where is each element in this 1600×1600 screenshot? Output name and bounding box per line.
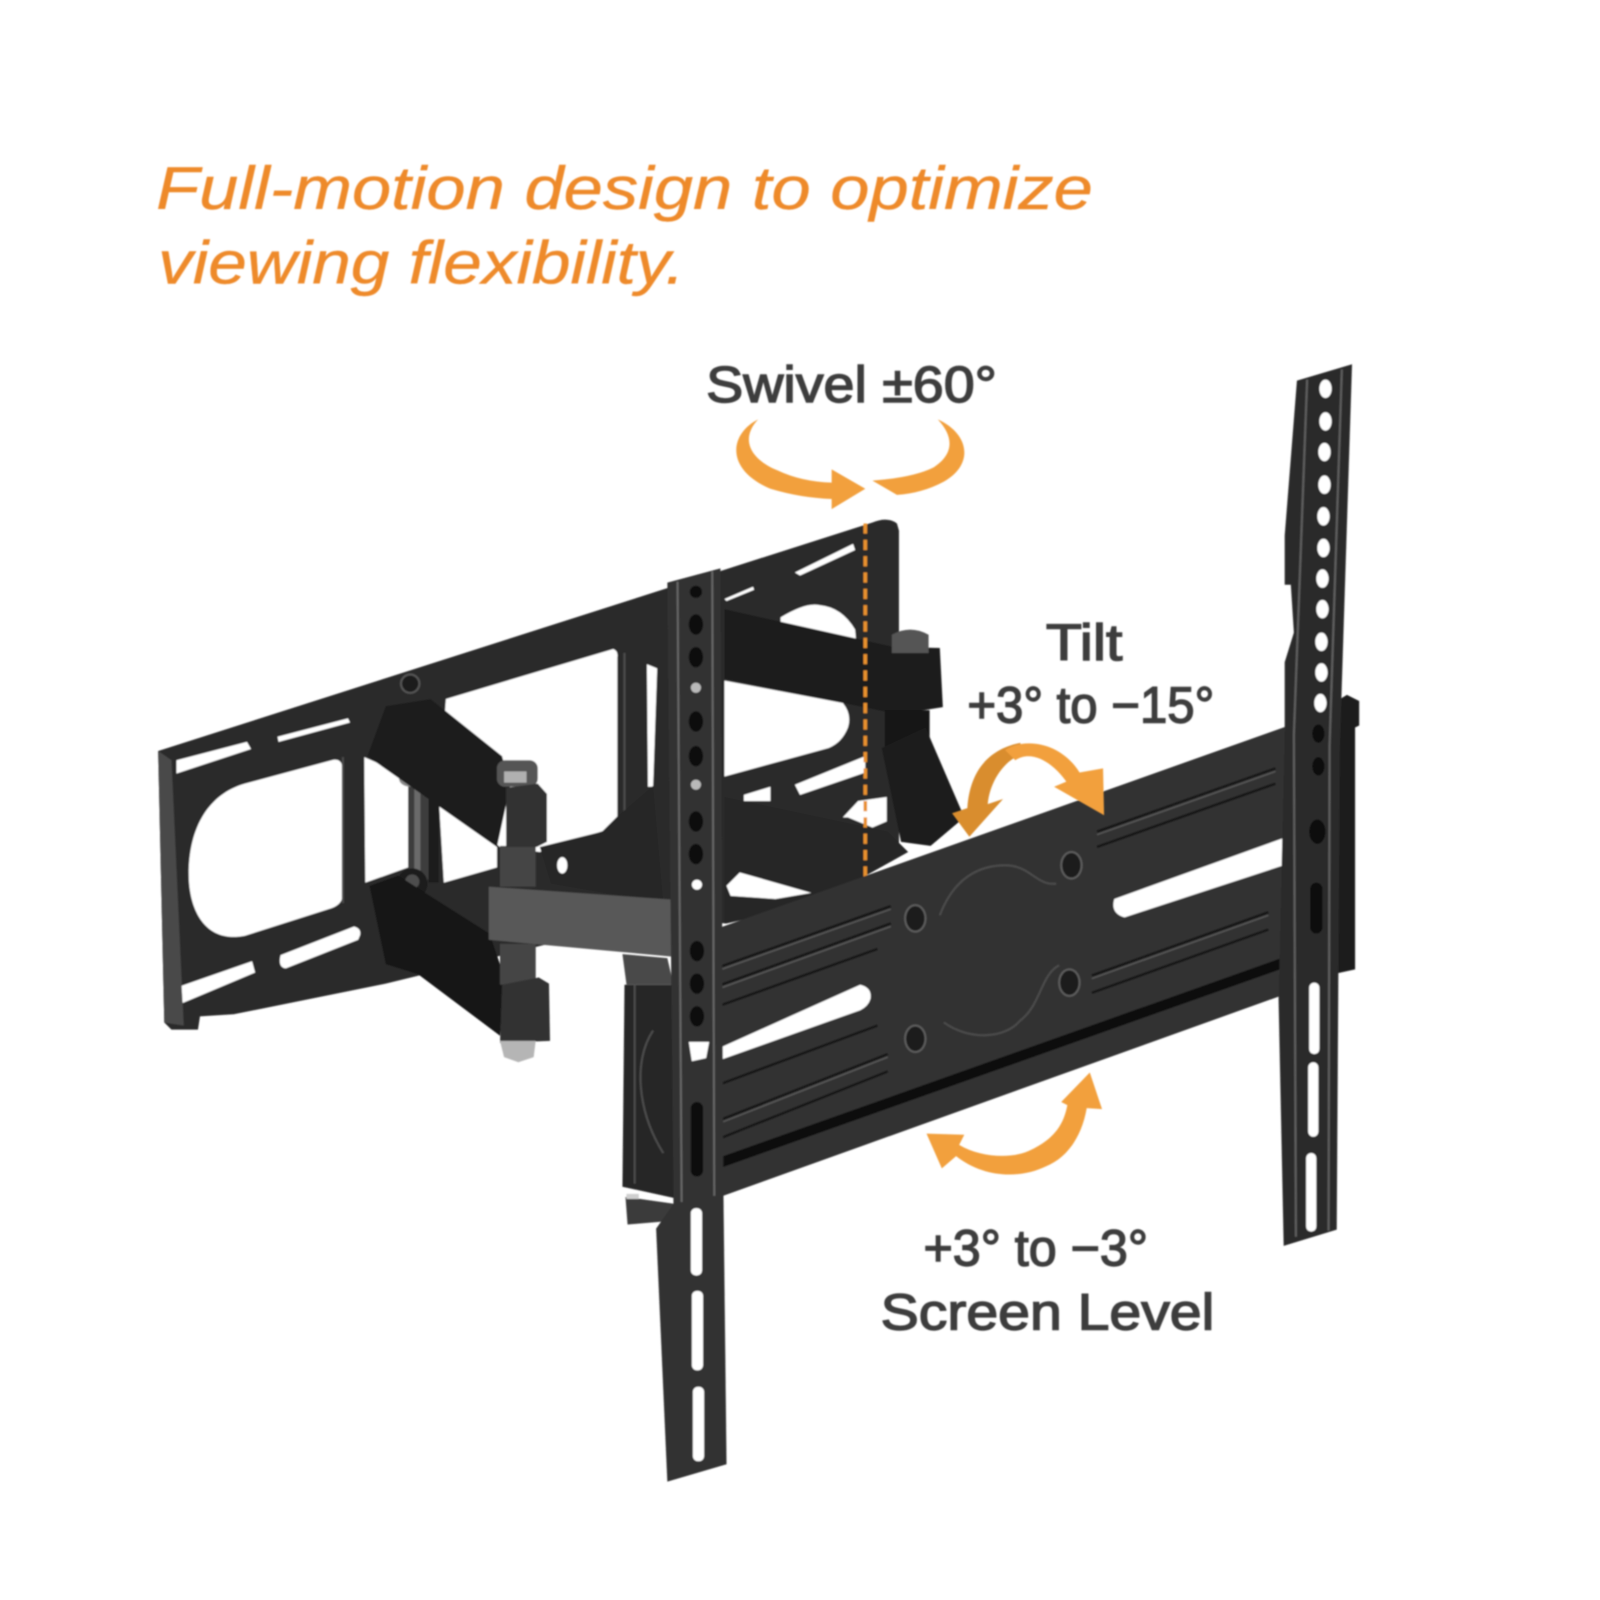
thin pivot post [397,770,439,899]
arm: right lower [724,797,908,923]
hinge column with bolts [497,760,550,1062]
arm: right upper [724,609,964,846]
rail hub outline [940,865,1059,1035]
rail grooves [721,768,1276,1138]
arm: lower left [369,876,505,1036]
wall plate [158,520,899,1030]
icon: tilt arrows [952,743,1104,837]
title [156,155,1093,297]
slots: left bracket [689,880,709,1461]
central bracket [540,786,663,903]
arm: swing box [489,887,678,957]
icon: screen level arrow [927,1072,1102,1175]
labels [706,356,1214,1341]
label: tilt range: +3° to −15° [967,676,1214,733]
right vertical TV bracket [1279,364,1352,1246]
title: viewing flexibility. [158,230,685,297]
horizontal TV rail [714,724,1292,1199]
label: tilt: Tilt [1046,614,1122,671]
rail slots [719,836,1290,1060]
icon: swivel arrows [736,419,964,509]
label: swivel: Swivel ±60° [706,356,997,413]
rail bolts [905,852,1082,1052]
illustration: TV wall mount [158,364,1359,1482]
arm: upper left [367,699,510,847]
label: screen level: Screen Level [881,1284,1214,1341]
left swing bracket [622,954,679,1224]
back box of right rail [1332,695,1359,974]
holes: right bracket top [1306,380,1332,1232]
holes: right bracket middle [1309,724,1326,934]
title: Full-motion design to optimize [156,155,1093,222]
bolt: top of wall plate [401,674,419,693]
gap under lower arm [727,872,811,899]
rail bottom lip [718,961,1288,1163]
wall plate openings [177,544,887,1003]
label: level range: +3° to −3° [923,1219,1148,1276]
holes: left bracket [689,586,704,1177]
swivel axis dashed line [864,523,867,883]
left vertical TV bracket [656,568,727,1482]
